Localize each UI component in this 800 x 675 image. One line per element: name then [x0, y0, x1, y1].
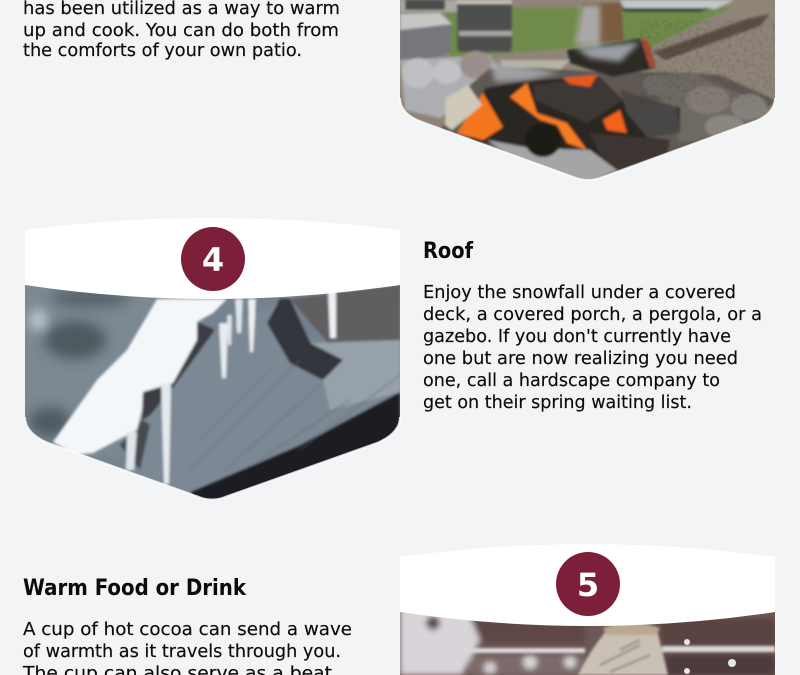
white cap behind number 4 — [25, 218, 400, 299]
panel: snowy photo with knit hat — [400, 612, 775, 675]
panel: roof photo with icicles — [25, 285, 400, 500]
badge: number 5: 5 — [577, 566, 599, 604]
wood grain — [296, 360, 400, 450]
text block: warm food description — [22, 620, 352, 675]
panel: fire pit photo — [400, 0, 775, 185]
smoke — [490, 5, 640, 82]
text block: fire pit description: up and cook. You can do both from — [23, 21, 339, 41]
text block: roof description: gazebo. If you don't currently have — [423, 327, 731, 347]
heading: warm food or drink: Warm Food or Drink — [23, 575, 247, 601]
badge: number 5 — [556, 552, 620, 616]
text block: fire pit description: the comforts of your own patio. — [23, 41, 302, 61]
text block: roof description: get on their spring waiting list. — [423, 393, 692, 413]
text block: roof description: one but are now realizing you need — [423, 349, 738, 369]
photo edge highlight: roof — [25, 417, 400, 500]
heading: roof: Roof — [423, 238, 473, 264]
text block: roof description: one, call a hardscape company to — [423, 371, 720, 391]
text block: warm food description: of warmth as it travels through you. — [23, 642, 341, 662]
text block: warm food description: A cup of hot cocoa can send a wave — [23, 620, 352, 640]
badge: number 4 — [181, 227, 245, 291]
badge: number 4: 4 — [202, 241, 224, 279]
text block: fire pit description — [23, 0, 340, 61]
text block: roof description: deck, a covered porch, a pergola, or a — [423, 305, 762, 325]
photo edge highlight: fire pit — [400, 98, 775, 180]
white cap behind number 5 — [400, 544, 775, 626]
text block: roof description — [423, 283, 762, 413]
text block: roof description: Enjoy the snowfall under a covered — [423, 283, 736, 303]
